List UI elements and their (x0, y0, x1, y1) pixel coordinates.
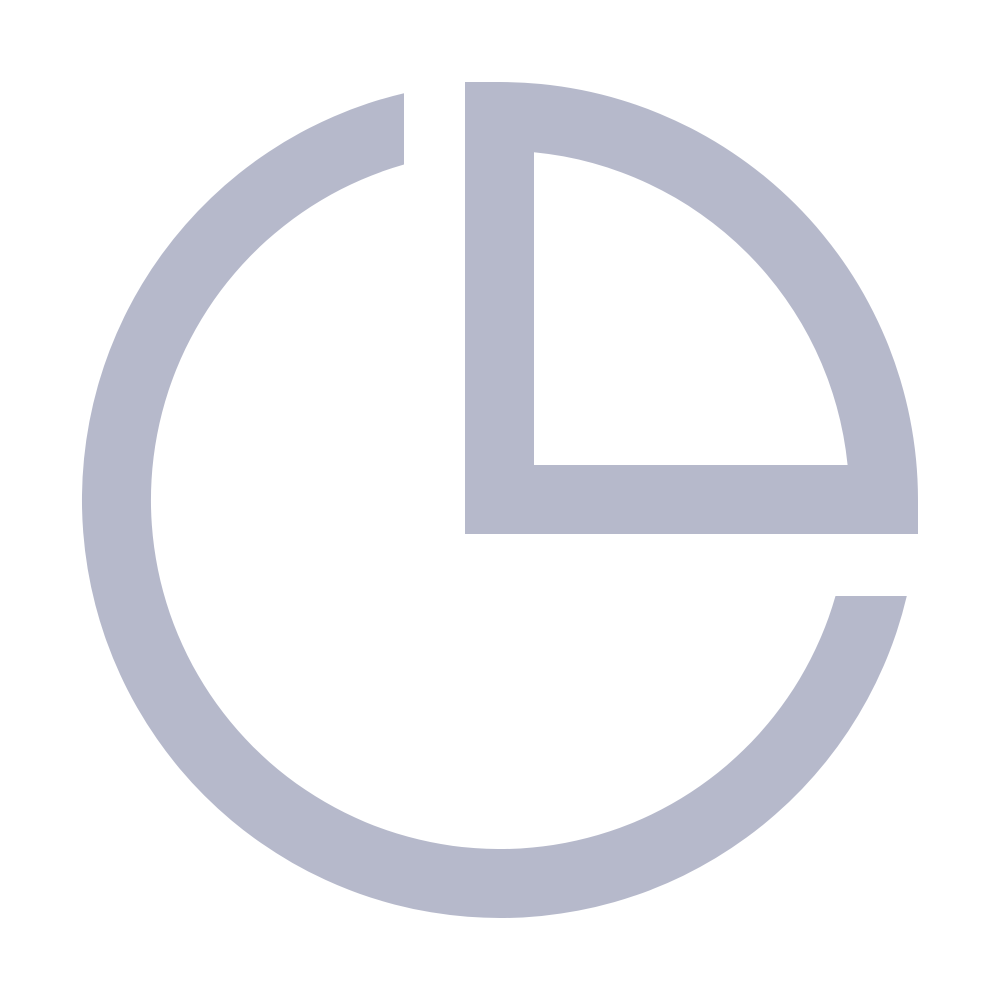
detached quarter slice outline (465, 82, 918, 534)
main ring arc of the pie (82, 93, 907, 918)
